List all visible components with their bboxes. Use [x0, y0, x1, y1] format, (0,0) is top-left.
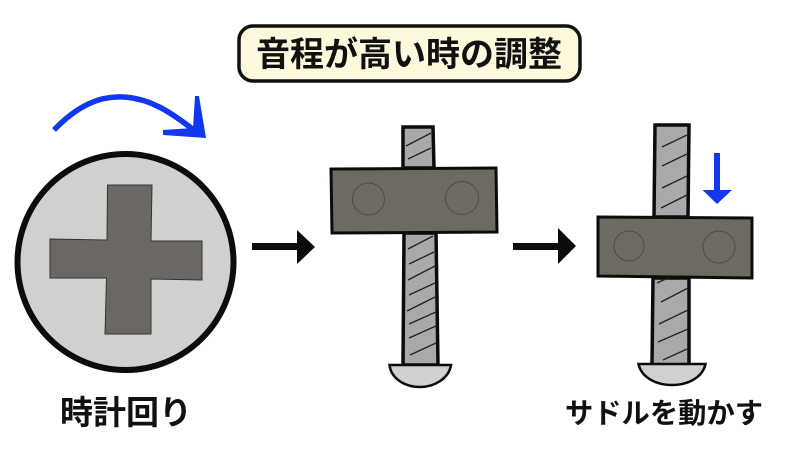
arrow: first step: [252, 230, 315, 264]
screw shaft: [403, 127, 438, 365]
screw shaft: [652, 125, 689, 365]
screw head: [638, 364, 706, 385]
icon: clockwise blue arrow: [54, 96, 206, 138]
diagram: saddle before adjustment: [331, 127, 497, 387]
label: move the saddle: サドルを動かす: [565, 397, 763, 429]
label: clockwise: 時計回り: [60, 394, 192, 431]
arrow: second step: [513, 228, 576, 264]
saddle block: [598, 217, 752, 278]
title: 音程が高い時の調整: [256, 35, 562, 74]
title: [239, 26, 580, 81]
screw head: [390, 365, 451, 387]
icon: blue down arrow: [702, 153, 732, 204]
diagram: saddle after adjustment: [598, 125, 752, 385]
saddle block: [331, 168, 497, 233]
icon: screw head: [18, 154, 234, 370]
